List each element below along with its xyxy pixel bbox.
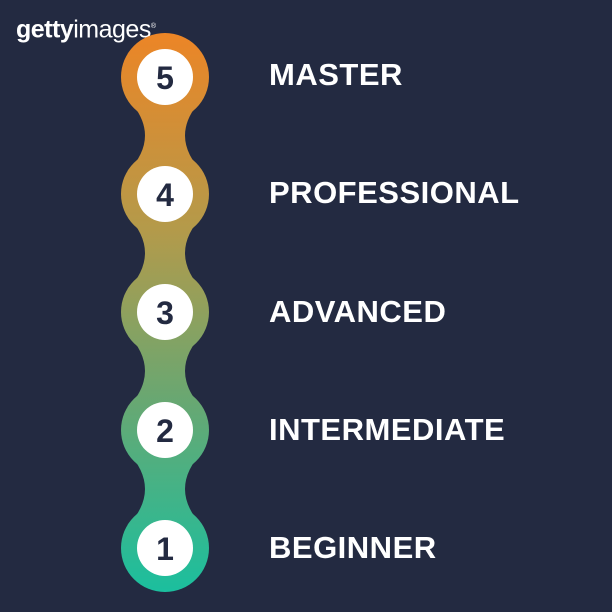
label: intermediate: INTERMEDIATE [269, 412, 505, 447]
logo: gettyimages: gettyimages® [16, 15, 156, 43]
chain of numbered circles: 3 [156, 295, 174, 331]
chain of numbered circles: 4 [156, 177, 174, 213]
chain of numbered circles: 1 [156, 531, 174, 567]
label: advanced: ADVANCED [269, 294, 446, 329]
label: master: MASTER [269, 57, 403, 92]
chain of numbered circles: 5 [156, 60, 174, 96]
chain of numbered circles: 2 [156, 413, 174, 449]
label: beginner: BEGINNER [269, 530, 437, 565]
label: professional: PROFESSIONAL [269, 175, 520, 210]
